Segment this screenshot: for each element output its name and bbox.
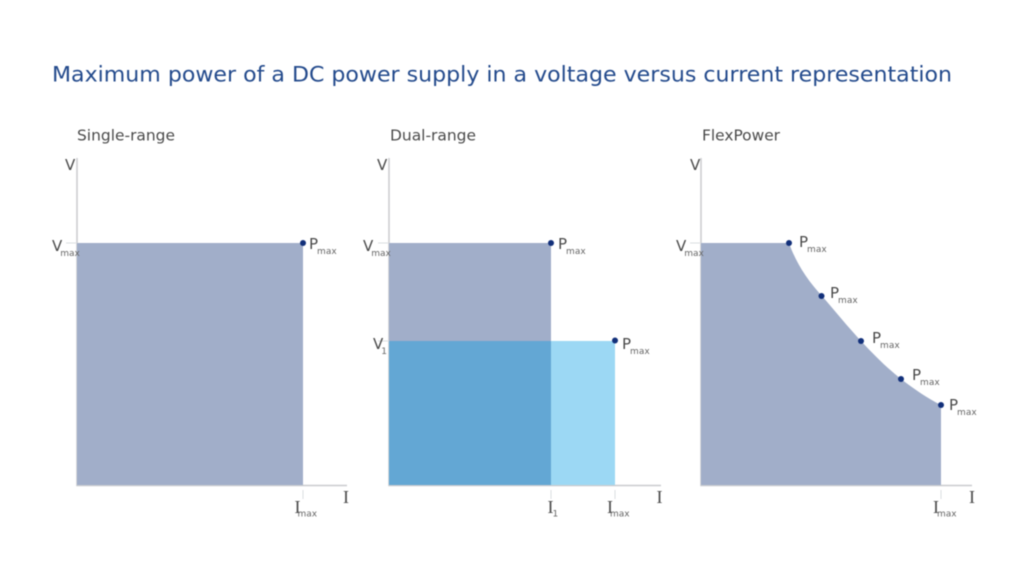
point: Pmax 1 — [786, 240, 792, 246]
axis label: Vmax: V — [676, 237, 687, 255]
label: Pmax 5: max — [957, 408, 977, 418]
axes: flexpower — [701, 158, 972, 486]
label: Pmax: P — [309, 235, 318, 253]
axis label: I: I — [343, 487, 349, 507]
area: single-range power — [77, 243, 303, 485]
point: Pmax lower — [612, 338, 618, 344]
panel: single-range — [52, 126, 349, 520]
label: Pmax 2: P — [830, 284, 839, 302]
label: Pmax 4: P — [912, 366, 921, 384]
axis label: V: V — [65, 156, 76, 174]
axis label: I1: 1 — [552, 510, 558, 520]
axis label: Imax: I — [933, 497, 939, 517]
title: Maximum power of a DC power supply in a voltage versus current representation — [52, 62, 952, 88]
point: Pmax 5 — [938, 402, 944, 408]
area: flexpower curve — [701, 243, 941, 485]
axes: single-range — [77, 158, 347, 486]
area: lower range extension — [551, 341, 615, 485]
axis label: Vmax: max — [60, 249, 81, 259]
label: Pmax lower: P — [622, 335, 631, 353]
label: Pmax 3: max — [880, 341, 900, 351]
axis label: V: V — [690, 156, 701, 174]
area: upper range — [389, 243, 551, 341]
axis label: Imax: max — [610, 510, 630, 520]
heading: dual-range: Dual-range — [390, 126, 476, 144]
axis label: Vmax: max — [371, 249, 392, 259]
axes: dual-range — [389, 158, 661, 486]
axis label: Imax: max — [937, 510, 957, 520]
axis label: Imax: I — [607, 497, 613, 517]
label: Pmax 2: max — [838, 296, 858, 306]
point: Pmax 3 — [858, 338, 864, 344]
axis label: Vmax: V — [363, 237, 374, 255]
label: Pmax: max — [317, 247, 337, 257]
point: Pmax 4 — [898, 376, 904, 382]
label: Pmax 5: P — [949, 396, 958, 414]
point: Pmax upper — [548, 240, 554, 246]
axis label: Imax: max — [298, 510, 318, 520]
axis label: I: I — [969, 487, 975, 507]
area: overlap — [389, 341, 551, 485]
heading: single-range: Single-range — [77, 126, 175, 144]
panel: flexpower — [676, 126, 977, 520]
axis label: Vmax: max — [684, 249, 705, 259]
label: Pmax 1: max — [807, 245, 827, 255]
axis label: Vmax: V — [52, 237, 63, 255]
point: Pmax — [300, 240, 306, 246]
panel: dual-range — [363, 126, 662, 520]
label: Pmax lower: max — [630, 347, 650, 357]
label: Pmax upper: P — [558, 235, 567, 253]
label: Pmax upper: max — [566, 247, 586, 257]
axis label: Imax: I — [294, 497, 300, 517]
axis label: V1: V — [373, 335, 384, 353]
axis label: V: V — [377, 156, 388, 174]
axis label: I1: I — [548, 497, 554, 517]
axis label: V1: 1 — [381, 347, 387, 357]
label: Pmax 1: P — [799, 233, 808, 251]
label: Pmax 4: max — [920, 378, 940, 388]
point: Pmax 2 — [818, 293, 824, 299]
axis label: I: I — [656, 487, 662, 507]
label: Pmax 3: P — [872, 329, 881, 347]
heading: flexpower: FlexPower — [702, 126, 781, 144]
